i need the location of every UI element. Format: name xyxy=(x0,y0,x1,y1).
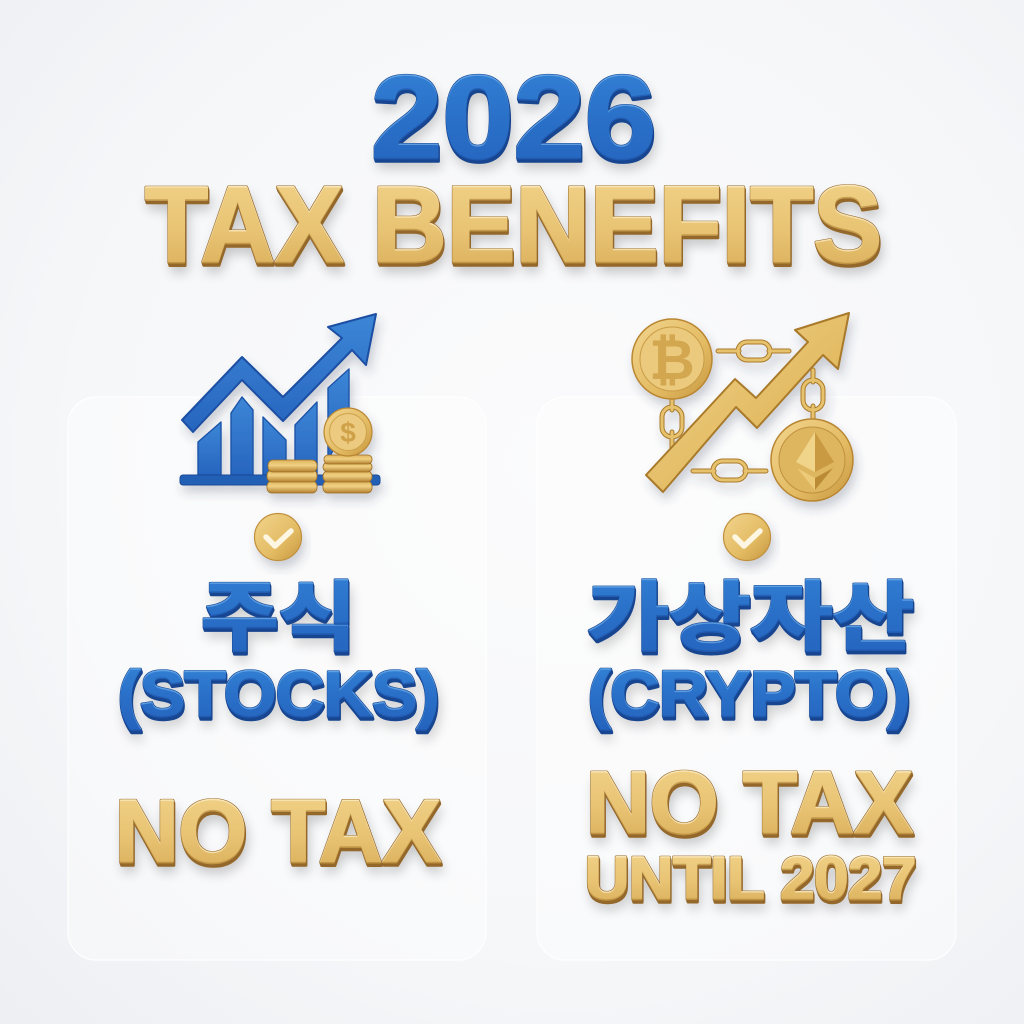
title: 2026: 2026 xyxy=(371,52,656,184)
icon: chain bottom xyxy=(693,461,766,480)
heading: crypto korean: 가상자산 xyxy=(587,556,914,666)
icon: chart bars xyxy=(198,369,349,475)
icon: left coin stack xyxy=(267,460,317,493)
icon: stocks check badge xyxy=(254,514,302,560)
icon: dollar coin: $ xyxy=(340,417,356,448)
heading: stocks korean: 주식 xyxy=(201,556,356,666)
icon: bitcoin coin: ₿ xyxy=(649,328,695,393)
icon: ethereum coin xyxy=(771,419,853,501)
heading: crypto english: (CRYPTO) xyxy=(588,658,910,730)
icon: dollar coin xyxy=(324,408,372,456)
icon: rising arrow xyxy=(182,314,376,432)
icon: rising gold arrow xyxy=(646,313,849,492)
icon: stocks chart with coins xyxy=(180,314,380,493)
panel: crypto xyxy=(537,397,956,960)
icon: crypto check badge xyxy=(724,514,770,560)
status: crypto until 2027: UNTIL 2027 xyxy=(585,845,916,912)
status: stocks no tax: NO TAX xyxy=(115,781,441,881)
icon: chain right xyxy=(803,370,823,420)
icon: chart baseline xyxy=(180,475,380,485)
title: tax benefits: TAX BENEFITS xyxy=(145,164,882,286)
icon: right coin stack xyxy=(323,455,372,493)
panel: stocks xyxy=(68,397,486,960)
status: crypto no tax: NO TAX xyxy=(586,753,913,852)
icon: chain left xyxy=(662,398,682,448)
heading: stocks english: (STOCKS) xyxy=(118,658,439,730)
icon: crypto arrow with coins and chains xyxy=(632,313,853,501)
icon: bitcoin coin xyxy=(632,319,712,399)
icon: chain top xyxy=(718,342,789,360)
